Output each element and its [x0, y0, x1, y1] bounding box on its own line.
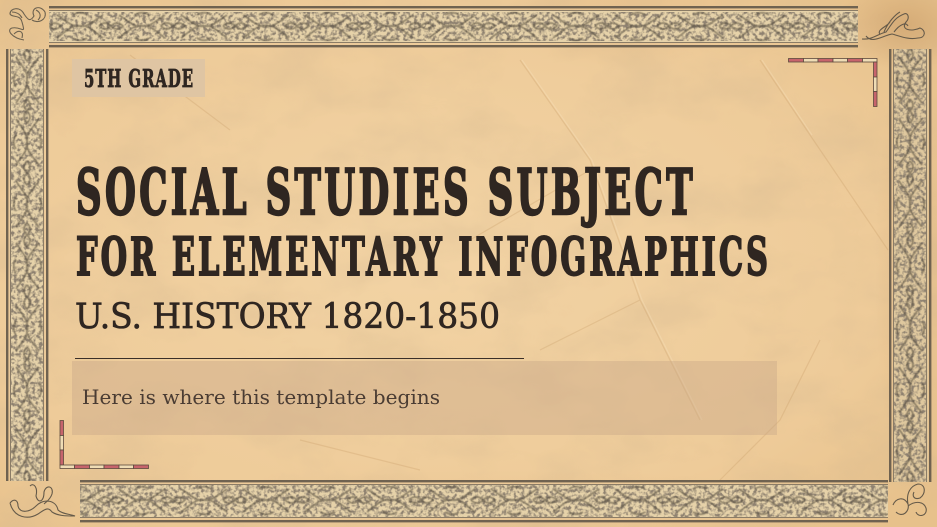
- bracket: top right: [788, 58, 877, 106]
- divider line: [75, 358, 524, 359]
- description panel: [72, 361, 777, 435]
- bracket: bottom left: [60, 420, 148, 468]
- corner flourish: top left: [10, 8, 45, 40]
- topic heading: U.S. HISTORY 1820-1850: [75, 297, 500, 337]
- grade badge: [72, 59, 205, 97]
- corner flourish: bottom right: [893, 484, 926, 515]
- border band: left: [6, 49, 48, 481]
- corner flourish: top right: [862, 12, 924, 39]
- description panel: Here is where this template begins: [82, 385, 440, 409]
- border band: right: [889, 49, 931, 482]
- border band: top: [49, 6, 858, 47]
- grade badge: 5TH GRADE: [84, 64, 194, 93]
- border band: bottom: [80, 480, 888, 522]
- corner flourish: bottom left: [10, 485, 75, 517]
